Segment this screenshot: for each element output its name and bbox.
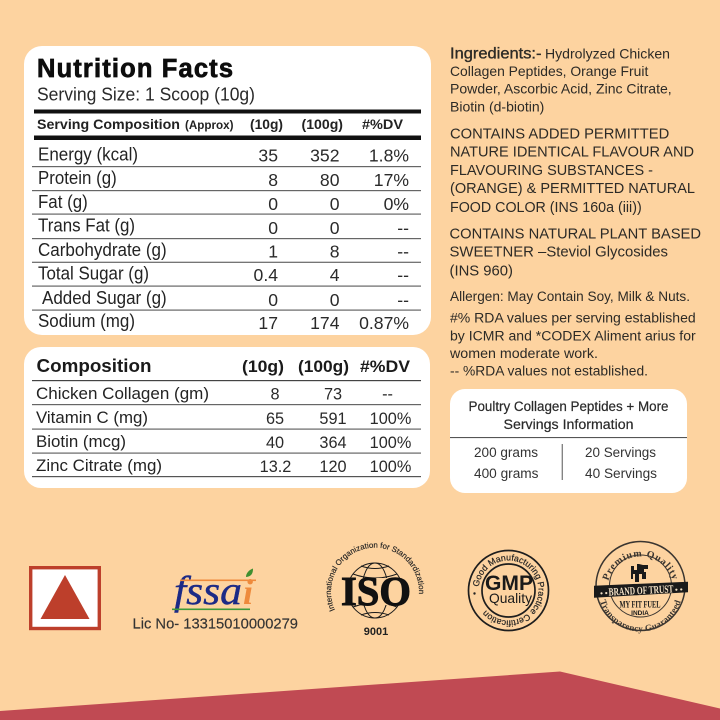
table header: Serving Composition: [37, 117, 180, 132]
row: total sugar: Total Sugar (g): [38, 264, 149, 284]
text block: added flavour: (ORANGE) & PERMITTED NATURAL: [450, 181, 695, 197]
row: energy: 35: [258, 146, 278, 166]
badge: iso 9001: International Organization for Standardization: [326, 542, 424, 612]
text block: added flavour: NATURE IDENTICAL FLAVOUR AND: [450, 145, 694, 161]
row: biotin: 364: [319, 434, 347, 452]
row: added sugar: Added Sugar (g): [42, 288, 167, 308]
icon: red triangle mark: [31, 568, 99, 628]
serving size: Serving Size: 1 Scoop (10g): [37, 84, 255, 104]
text block: rda note: #% RDA values per serving established: [450, 311, 696, 326]
text block: allergen: Allergen: May Contain Soy, Milk & Nuts.: [450, 289, 690, 304]
text block: ingredients: [450, 45, 672, 114]
badge: gmp quality: Good Manufacturing Practice Certification: [473, 554, 544, 627]
row: protein: Protein (g): [38, 168, 117, 188]
table header: (10g): [250, 117, 283, 132]
row: vitamin c: 591: [319, 410, 347, 428]
table header: (Approx): [185, 119, 234, 132]
row: total sugar: 4: [330, 265, 340, 285]
heading: nutrition facts: Nutrition Facts: [37, 55, 233, 83]
logo: fssai: i: [243, 572, 253, 612]
table header: [34, 110, 421, 140]
text block: ingredients: Hydrolyzed Chicken: [545, 45, 670, 61]
row: chicken collagen: --: [382, 386, 393, 404]
row: sodium: 17: [258, 313, 278, 333]
row: fat: 0%: [384, 194, 409, 214]
badge: brand of trust: Premium Quality: [602, 551, 677, 581]
row: energy: Energy (kcal): [38, 144, 138, 164]
row: fat: Fat (g): [38, 192, 88, 212]
composition header: (100g): [298, 357, 349, 376]
pack sizes: 400 grams: [474, 466, 539, 481]
row: carbohydrate: Carbohydrate (g): [38, 240, 167, 260]
logo: fssai: fssa: [174, 568, 242, 613]
row: chicken collagen: 8: [270, 386, 280, 404]
row: chicken collagen: [32, 384, 421, 405]
row: trans fat: [32, 216, 421, 239]
row: trans fat: --: [397, 218, 409, 238]
text block: added flavour: [450, 126, 695, 216]
table header: #%DV: [362, 117, 404, 132]
row: carbohydrate: 1: [268, 242, 278, 262]
text block: rda note: women moderate work.: [449, 346, 598, 361]
row: fat: 0: [330, 194, 340, 214]
badge: iso 9001: ISO: [341, 568, 411, 614]
row: biotin: Biotin (mcg): [36, 432, 126, 451]
composition header: (10g): [242, 357, 284, 376]
text block: rda note: by ICMR and *CODEX Aliment arius for: [450, 329, 696, 344]
text block: ingredients: Collagen Peptides, Orange Fruit: [450, 63, 648, 79]
bottom red wave band: [0, 672, 720, 720]
row: vitamin c: 65: [266, 410, 284, 428]
pack sizes: [474, 445, 539, 481]
row: vitamin c: Vitamin C (mg): [36, 408, 148, 427]
icon: dumbbell figure: [631, 564, 648, 582]
row: added sugar: [32, 288, 421, 311]
badge: brand of trust: MY FIT FUEL: [620, 600, 660, 610]
serving counts: 40 Servings: [585, 466, 657, 481]
row: total sugar: 0.4: [254, 265, 278, 285]
serving counts: [585, 445, 657, 481]
row: protein: 17%: [374, 170, 409, 190]
row: sodium: 174: [310, 313, 340, 333]
row: zinc citrate: Zinc Citrate (mg): [36, 456, 162, 475]
row: sodium: Sodium (mg): [38, 311, 135, 331]
composition header: #%DV: [360, 357, 411, 376]
row: carbohydrate: 8: [330, 242, 340, 262]
text block: added flavour: FOOD COLOR (INS 160a (iii)): [450, 200, 642, 216]
row: zinc citrate: [32, 456, 421, 477]
pack sizes: 200 grams: [474, 445, 538, 460]
text block: sweetener: CONTAINS NATURAL PLANT BASED: [450, 226, 701, 242]
composition header: Composition: [36, 355, 152, 376]
row: energy: 1.8%: [369, 146, 409, 166]
text block: rda note: -- %RDA values not established.: [450, 364, 648, 379]
row: total sugar: --: [397, 265, 409, 285]
text block: added flavour: FLAVOURING SUBSTANCES -: [450, 163, 653, 179]
row: total sugar: [32, 264, 421, 287]
row: trans fat: 0: [330, 218, 340, 238]
row: sodium: [38, 311, 409, 333]
row: zinc citrate: 100%: [370, 458, 411, 476]
servings heading: [468, 399, 668, 432]
text block: sweetener: (INS 960): [450, 264, 513, 280]
panel: servings information: [450, 389, 687, 493]
table header: (100g): [302, 117, 343, 132]
row: protein: 8: [268, 170, 278, 190]
logo: fssai: [132, 568, 298, 633]
row: zinc citrate: 13.2: [260, 458, 291, 476]
composition header: [32, 355, 421, 381]
text block: ingredients: Ingredients:-: [450, 45, 542, 62]
row: biotin: 100%: [370, 434, 411, 452]
row: biotin: 40: [266, 434, 284, 452]
row: vitamin c: 100%: [370, 410, 411, 428]
badge: brand of trust: [594, 540, 688, 634]
row: fat: [32, 192, 421, 215]
row: trans fat: Trans Fat (g): [38, 216, 135, 236]
row: biotin: [32, 432, 421, 454]
row: sodium: 0.87%: [359, 313, 409, 333]
row: added sugar: 0: [268, 290, 278, 310]
row: fat: 0: [268, 194, 278, 214]
row: carbohydrate: [32, 240, 421, 263]
badge: brand of trust: BRAND OF TRUST: [608, 583, 674, 599]
row: zinc citrate: 120: [319, 458, 347, 476]
row: protein: [32, 168, 421, 191]
serving counts: 20 Servings: [585, 445, 656, 460]
row: chicken collagen: 73: [324, 386, 342, 404]
row: vitamin c: [32, 408, 421, 430]
text block: ingredients: Powder, Ascorbic Acid, Zinc Citrate,: [450, 80, 672, 96]
text block: ingredients: Biotin (d-biotin): [450, 98, 544, 114]
servings heading: Servings Information: [504, 417, 634, 432]
badge: brand of trust: • •: [600, 589, 608, 598]
badge: gmp quality: GMP: [485, 572, 533, 595]
row: chicken collagen: Chicken Collagen (gm): [36, 384, 209, 403]
panel: nutrition facts: [24, 46, 431, 335]
servings heading: Poultry Collagen Peptides + More: [468, 399, 668, 414]
text block: added flavour: CONTAINS ADDED PERMITTED: [450, 126, 669, 142]
badge: iso 9001: 9001: [364, 626, 388, 638]
row: energy: [32, 144, 421, 167]
row: carbohydrate: --: [397, 242, 409, 262]
text block: sweetener: [450, 226, 701, 280]
text block: sweetener: SWEETNER –Steviol Glycosides: [450, 245, 668, 261]
row: added sugar: 0: [330, 290, 340, 310]
badge: brand of trust: INDIA: [631, 610, 649, 617]
text block: rda note: [449, 311, 696, 379]
row: energy: 352: [310, 146, 340, 166]
badge: gmp quality: Quality: [489, 591, 532, 606]
row: added sugar: --: [397, 290, 409, 310]
badge: brand of trust: • •: [675, 585, 683, 594]
panel: composition: [24, 347, 430, 488]
licence number: Lic No- 13315010000279: [132, 617, 298, 633]
row: protein: 80: [320, 170, 340, 190]
badge: brand of trust: Transparency Guaranteed: [600, 599, 681, 634]
row: trans fat: 0: [268, 218, 278, 238]
